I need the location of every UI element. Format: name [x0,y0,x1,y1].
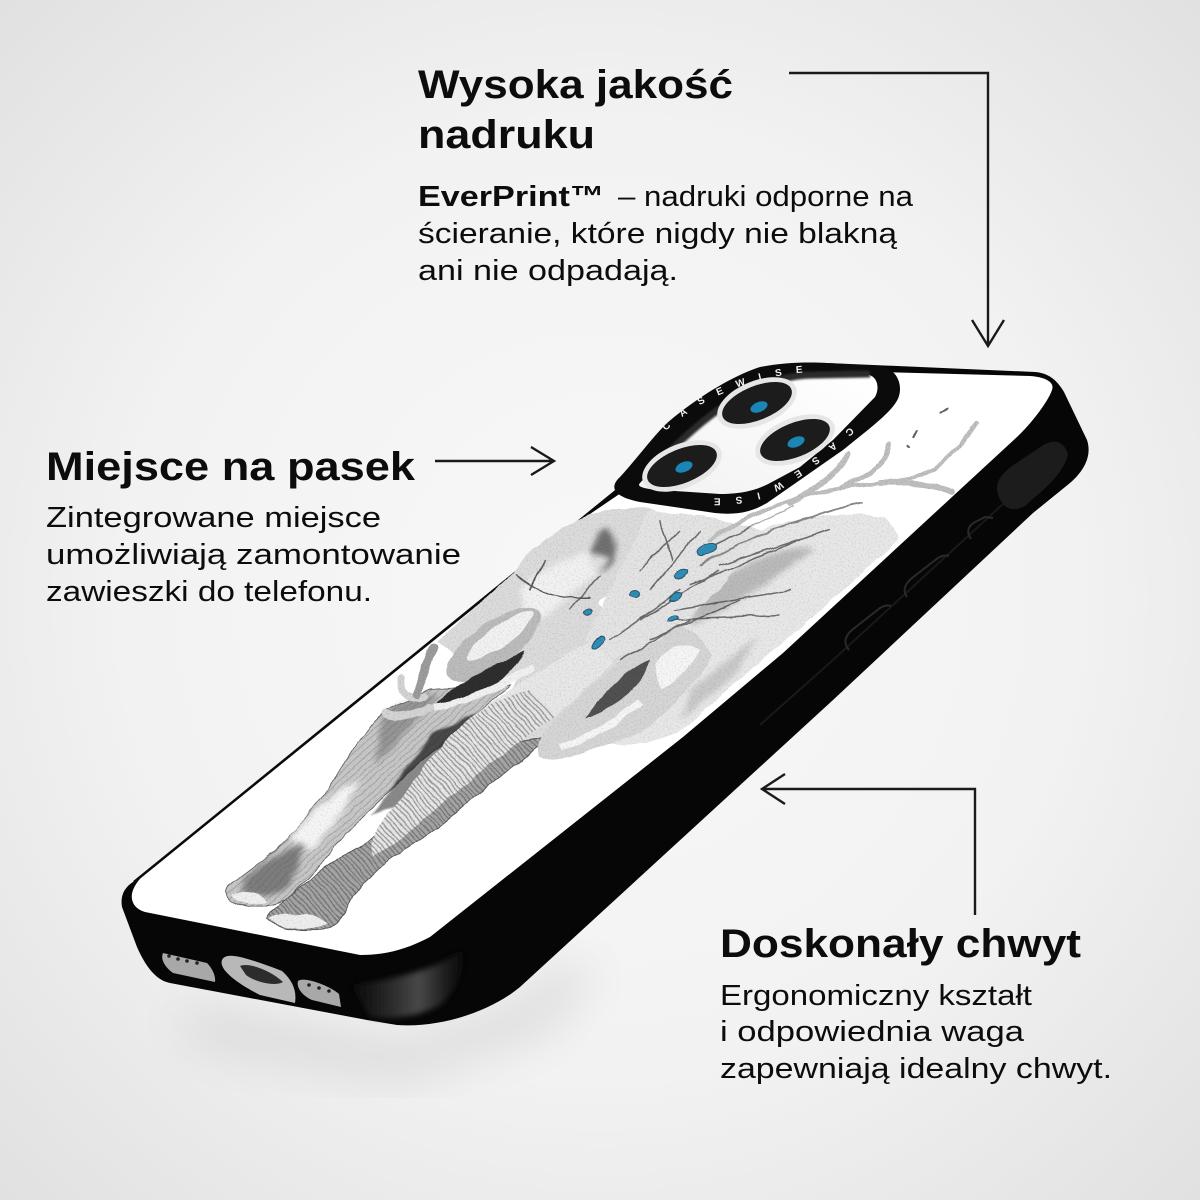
CASEWISE text bottom: CASEWISE [714,428,854,506]
right body [585,514,898,745]
blue eyes [583,541,718,652]
shadow between leg and trunk [370,690,510,817]
lens top [710,367,804,439]
antlers [700,408,977,565]
front leg and foot [227,685,510,907]
description [418,181,914,287]
heading: Wysoka jakość [418,63,733,107]
side switch bump [997,442,1068,509]
volume up button [905,555,949,597]
head detail strokes [570,505,830,660]
callout: grip [720,922,1112,1085]
right ear [539,624,712,759]
bottom left speaker [162,953,215,982]
heading: nadruku [418,113,595,157]
description: umożliwiają zamontowanie [46,539,461,571]
callout: print quality [418,63,914,287]
camera island [614,362,900,514]
action button [968,517,993,539]
head [585,512,760,660]
volume down button [845,605,891,650]
description: i odpowiednia waga [720,1016,1025,1048]
description: ani nie odpadają. [418,255,678,287]
heading: Miejsce na pasek [46,445,416,489]
arrow: grip [762,774,975,915]
tusk branches left [385,648,433,716]
description: Ergonomiczny kształt [720,980,1032,1012]
phone case [122,363,1089,1025]
heading [418,63,733,157]
callout: strap slot [46,445,461,608]
description: zawieszki do telefonu. [46,576,372,608]
head and trunk base [500,595,650,755]
heading: Doskonały chwyt [720,922,1081,966]
lens right [748,404,842,476]
elephant illustration [227,408,977,930]
description [720,980,1112,1085]
description: EverPrint™ [418,181,604,213]
left ear [434,508,672,708]
description: ścieranie, które nigdy nie blakną [418,218,898,250]
screen print area [132,372,1053,955]
phone shadow [170,960,590,1075]
hind leg and foot [266,735,555,930]
description: Zintegrowane miejsce [46,502,381,534]
description: zapewniają idealny chwyt. [720,1053,1112,1085]
top inner shadow [655,374,870,467]
lens left [635,430,729,502]
charging port [222,956,295,1003]
arrow: print quality [789,73,1004,346]
corner highlight [352,950,463,1018]
case body [122,363,1089,1025]
island frame [614,362,900,514]
description: – nadruki odporne na [618,181,914,213]
side buttons [845,517,993,650]
bottom right speaker [298,980,341,1007]
trunk [371,638,625,856]
description [46,502,461,608]
arrow: strap slot [435,447,554,475]
island glass [639,374,878,494]
CASEWISE text top: CASEWISE [663,366,802,430]
left edge line [134,482,627,882]
side edge ridge [760,470,1040,725]
